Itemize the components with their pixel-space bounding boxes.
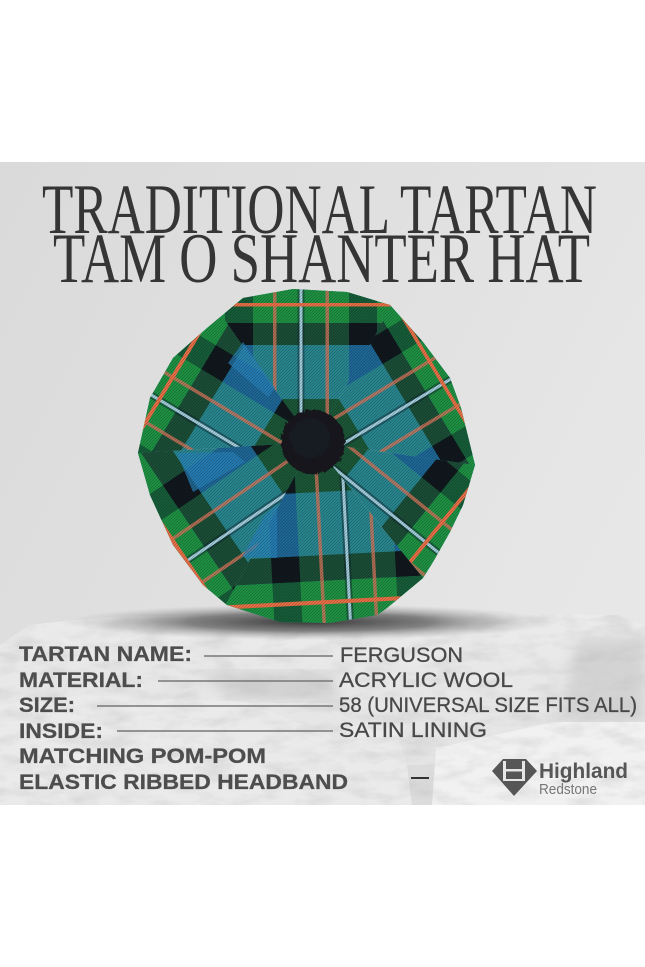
- logo: Highland Redstone: Redstone: [539, 781, 597, 798]
- pom-pom: [281, 410, 345, 474]
- logo: Highland Redstone: Highland: [539, 759, 628, 783]
- shadow under hat: [65, 604, 555, 640]
- spec lines: [97, 656, 333, 731]
- spec labels: SIZE:: [19, 693, 75, 717]
- icon: diamond H: [492, 759, 537, 796]
- spec values: FERGUSON: [340, 643, 463, 667]
- panel: upper left: [138, 316, 294, 453]
- spec values: 58 (UNIVERSAL SIZE FITS ALL): [339, 693, 637, 717]
- title: [42, 171, 597, 298]
- spec values: SATIN LINING: [339, 718, 487, 742]
- rock pedestal: [0, 612, 645, 805]
- background panel: [0, 162, 645, 805]
- spec labels: ELASTIC RIBBED HEADBAND: [19, 770, 348, 794]
- panel: top: [222, 289, 394, 417]
- spec labels: TARTAN NAME:: [19, 642, 192, 666]
- hat: [138, 289, 475, 623]
- bright blue patches: [177, 342, 277, 558]
- panel: bottom: [226, 466, 423, 623]
- spec labels: MATCHING POM-POM: [19, 744, 266, 768]
- panel: upper right: [329, 306, 475, 465]
- logo: Highland Redstone: [492, 759, 628, 798]
- panel: lower left: [138, 444, 298, 604]
- twill texture: [130, 280, 485, 630]
- panel: lower right: [333, 446, 475, 578]
- spec values: [339, 643, 637, 742]
- spec labels: MATERIAL:: [19, 668, 143, 692]
- spec values: ACRYLIC WOOL: [339, 668, 513, 692]
- spec labels: INSIDE:: [19, 719, 103, 743]
- spec labels: [19, 642, 348, 794]
